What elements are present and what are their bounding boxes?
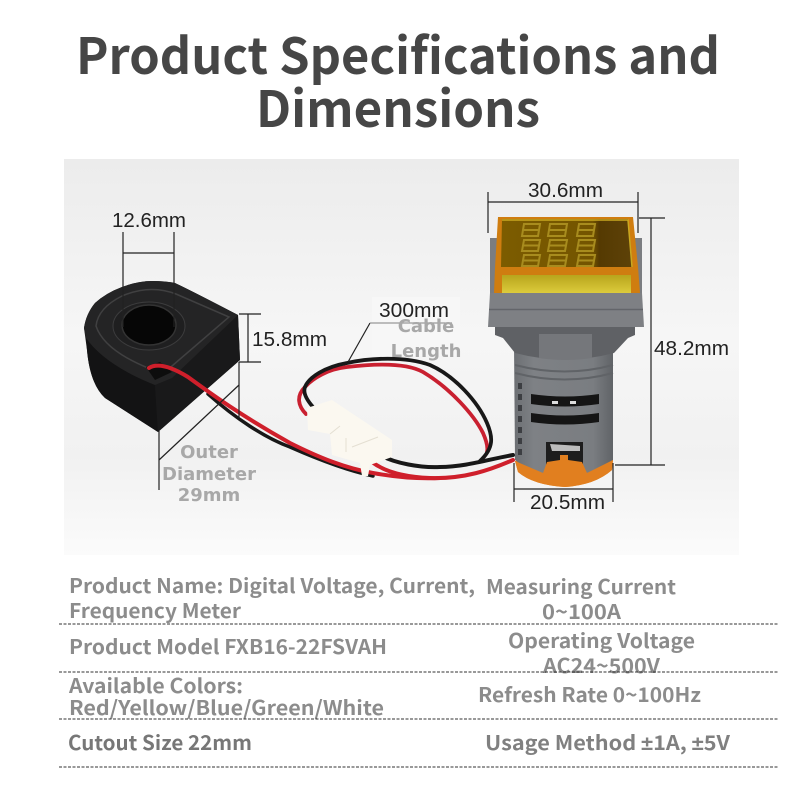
title — [76, 17, 720, 142]
dimension: 300mm cable length: 300mm — [379, 300, 449, 322]
dimension: 30.6mm — [488, 180, 638, 233]
dimension: 300mm cable length — [348, 297, 461, 362]
dimension: outer diameter 29mm: Outer — [180, 442, 238, 463]
meter hex nut — [495, 327, 635, 360]
dimension: 20.5mm: 20.5mm — [530, 492, 605, 514]
spec: available colors: Red/Yellow/Blue/Green/White — [69, 692, 384, 721]
dimension: outer diameter 29mm: 29mm — [178, 485, 240, 506]
dimension: 15.8mm — [239, 314, 327, 362]
spec: available colors: Available Colors: — [68, 670, 243, 699]
dimension: 48.2mm — [615, 218, 729, 465]
panel: product photo with dimensions — [64, 159, 739, 555]
icon: digital panel meter — [488, 217, 644, 487]
dimension: 12.6mm — [112, 210, 186, 327]
spec: refresh rate: Refresh Rate 0~100Hz — [478, 679, 701, 708]
meter label text marks — [518, 383, 522, 456]
meter seven-segment digits — [522, 224, 595, 266]
dimension: 20.5mm — [514, 463, 613, 514]
dimension: 48.2mm: 48.2mm — [654, 338, 729, 360]
meter barrel — [514, 345, 613, 473]
icon: wires from sensor to meter — [149, 359, 513, 478]
dimension: 15.8mm: 15.8mm — [252, 329, 327, 351]
dimension: outer diameter 29mm: Diameter — [162, 464, 256, 485]
title: Product Specifications and — [76, 17, 720, 89]
spec: operating voltage: AC24~500V — [542, 650, 661, 679]
spec: product name: Product Name: Digital Voltage, Current, — [69, 570, 475, 599]
spec: measuring current — [486, 571, 677, 625]
spec: cutout size: Cutout Size 22mm — [68, 727, 252, 756]
specifications table — [59, 570, 779, 767]
spec: product name — [69, 570, 475, 624]
spec: measuring current: 0~100A — [542, 596, 621, 625]
icon: white wire connector — [307, 400, 392, 476]
dimension: 300mm cable length: Length — [391, 341, 461, 362]
meter vent slots — [531, 394, 599, 424]
meter bezel — [488, 293, 644, 327]
spec: product model: Product Model FXB16-22FSVAH — [69, 631, 387, 660]
dimension: 12.6mm: 12.6mm — [112, 210, 186, 232]
meter yellow lens — [494, 217, 640, 293]
dimension: 300mm cable length: Cable — [398, 316, 454, 337]
spec: measuring current: Measuring Current — [486, 571, 677, 600]
title: Dimensions — [256, 70, 540, 142]
meter orange base — [515, 459, 613, 487]
spec: operating voltage: Operating Voltage — [508, 625, 695, 654]
spec: operating voltage — [508, 625, 695, 679]
spec: usage method: Usage Method ±1A, ±5V — [485, 727, 731, 756]
spec: available colors — [68, 670, 384, 721]
dimension: 30.6mm: 30.6mm — [528, 180, 603, 202]
spec: product name: Frequency Meter — [69, 595, 241, 624]
dimension: outer diameter 29mm — [159, 362, 256, 506]
meter terminal window — [515, 442, 613, 487]
icon: current sensor ring — [84, 281, 240, 432]
meter grooves — [515, 365, 613, 380]
